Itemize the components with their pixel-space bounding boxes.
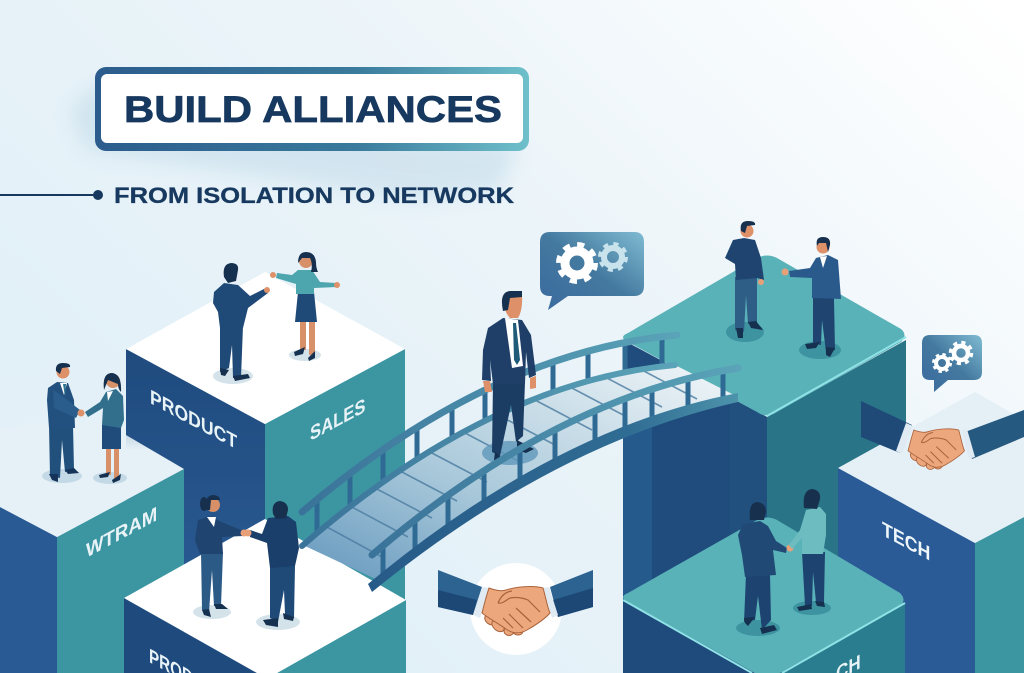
subtitle with line <box>0 183 514 208</box>
handshake icon: center <box>438 563 593 655</box>
bridge beam <box>368 393 738 592</box>
title shadow <box>70 85 520 200</box>
block: tech <box>838 392 1024 673</box>
person: man at wtram <box>42 363 82 483</box>
title text: BUILD ALLIANCES <box>124 89 502 130</box>
label: product: PRODUCT <box>150 386 237 455</box>
block: product and sales <box>126 272 405 673</box>
person: woman at lower product <box>193 495 248 619</box>
person: man on bridge <box>482 291 538 465</box>
block: lower product <box>124 519 406 673</box>
speech bubble: gears large <box>540 232 644 310</box>
person: teal shirt lower teal <box>789 489 831 615</box>
title box <box>95 67 529 151</box>
person: man upper left <box>725 221 764 342</box>
handshake icon: right <box>861 401 1024 469</box>
speech bubble: gears small <box>922 335 982 392</box>
bridge front rail <box>372 368 738 578</box>
label: sales: SALES <box>310 394 365 446</box>
bridge <box>302 291 738 592</box>
bridge dark gap <box>628 343 658 368</box>
person: man at lower product <box>244 501 300 630</box>
person: man at product <box>213 263 270 384</box>
person: man upper right <box>782 237 841 359</box>
bridge deck <box>305 365 738 582</box>
person: woman at product <box>270 252 340 361</box>
block: lower teal platform <box>623 518 905 673</box>
block: wtram <box>0 350 184 673</box>
label: wtram: WTRAM <box>86 503 157 563</box>
bridge back rail <box>302 335 677 532</box>
label: tech: TECH <box>882 518 930 566</box>
block: upper teal platform <box>623 256 906 673</box>
person: man lower teal <box>736 502 794 636</box>
person: woman at wtram <box>78 373 127 484</box>
subtitle text: FROM ISOLATION TO NETWORK <box>114 183 514 208</box>
